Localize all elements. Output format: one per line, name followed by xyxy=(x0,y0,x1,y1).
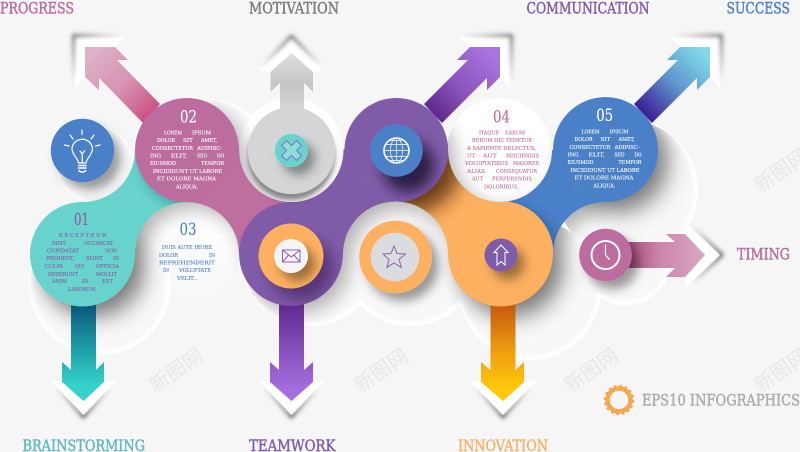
block 02: ELIT, xyxy=(171,154,187,160)
ribbon soft shadow xyxy=(37,104,670,318)
ribbon: orange section xyxy=(396,150,554,307)
block 05: AMET, xyxy=(618,137,635,143)
block 04: UT xyxy=(467,154,476,160)
watermark: 新图网 xyxy=(355,144,417,197)
block 05: ELIT, xyxy=(588,152,605,158)
block 02: SIT xyxy=(183,138,194,144)
node: cross on gray disc xyxy=(248,107,335,194)
icon: cross xyxy=(277,136,306,165)
icon: light bulb xyxy=(64,130,100,172)
block 01: SINT xyxy=(52,241,67,247)
ribbon: purple section xyxy=(239,98,449,306)
label: timing: TIMING xyxy=(737,246,790,264)
block 04: ITAQUE xyxy=(479,130,499,136)
block 05: TEMPOR xyxy=(618,160,643,166)
arrow: communication xyxy=(424,36,512,123)
block 04: ALIAS xyxy=(466,169,485,175)
block 02: TEMPOR xyxy=(201,161,225,167)
block 05: EIUSMOD xyxy=(568,160,594,166)
white recessed circles xyxy=(58,98,551,306)
flowing ribbon xyxy=(20,97,660,315)
block 04: A SAPIENTE DELECTUS, xyxy=(466,146,536,152)
block 05: CONSECTETUR xyxy=(570,145,612,151)
block 02: ING xyxy=(150,154,161,160)
block 01: MOLLIT xyxy=(96,272,117,278)
arrow: innovation xyxy=(469,300,537,417)
label: motivation: MOTIVATION xyxy=(249,0,339,18)
block 03: REPREHENDERIT xyxy=(159,260,216,266)
ribbon: pink section xyxy=(135,98,291,254)
block 02: IPSUM xyxy=(192,130,212,136)
arrow: timing xyxy=(625,222,722,289)
watermark: 新图网 xyxy=(560,344,622,397)
icon: globe xyxy=(384,138,409,163)
ribbon: teal shadow under pink xyxy=(140,104,244,208)
block 04: MAIORES xyxy=(513,161,539,167)
block 01: SUNT xyxy=(86,256,104,262)
block 04: AUT xyxy=(482,154,498,160)
block 01: ID xyxy=(82,279,88,285)
block 01: NON xyxy=(105,248,117,254)
block 02: CONSECTETUR xyxy=(152,146,194,152)
ribbon: dark shadow on upper purple xyxy=(382,140,434,192)
block 05 xyxy=(568,106,643,190)
block 02: INCIDIDUNT UT LABORE xyxy=(153,169,222,175)
node: arrow badge xyxy=(484,238,518,272)
block 04 xyxy=(464,108,539,190)
arrow: progress xyxy=(74,36,160,123)
node: globe xyxy=(370,124,423,177)
arrow: success xyxy=(634,36,722,123)
block 05: IPSUM xyxy=(610,130,629,136)
number 05: 05 xyxy=(596,106,613,125)
block 01: CULPA xyxy=(45,264,63,270)
block 03: VELIT... xyxy=(176,276,198,282)
block 02: EIUSMOD xyxy=(150,161,176,167)
label: success: SUCCESS xyxy=(726,0,790,18)
block 02: LOREM xyxy=(164,130,183,136)
block 05: ET DOLORE MAGNA xyxy=(574,176,634,182)
block 01: EXCEPTEUR xyxy=(59,233,107,239)
watermark: 新图网 xyxy=(350,344,412,397)
block 04: AUT xyxy=(471,176,483,182)
node: idea bulb xyxy=(51,119,114,182)
block 05: ALIQUA. xyxy=(593,184,616,190)
block 02: ET DOLORE MAGNA xyxy=(157,176,216,182)
block 05: ADIPISC- xyxy=(613,145,640,151)
watermark: 新图网 xyxy=(155,144,217,197)
block 05: ING xyxy=(568,152,578,158)
cloud halo interior xyxy=(33,102,694,356)
label: progress: PROGRESS xyxy=(0,0,74,18)
block 04: EARUM xyxy=(505,130,526,136)
block 02: AMET, xyxy=(200,138,217,144)
block 01: QUI xyxy=(75,264,84,270)
block 02: SED xyxy=(197,154,207,160)
icon: bookmark arrow xyxy=(494,245,508,265)
block 02: DO xyxy=(217,154,224,160)
block 01: CUPIDATAT xyxy=(47,248,80,254)
icon: envelope xyxy=(282,250,300,262)
block 04: REICIENDIS xyxy=(506,154,539,160)
node: clock xyxy=(579,229,632,281)
icon: star xyxy=(383,246,406,268)
block 01: LABORUM. xyxy=(68,287,97,293)
block 03: IN xyxy=(163,268,169,274)
block 02: ALIQUA. xyxy=(175,184,198,190)
block 01: ANIM xyxy=(51,279,68,285)
block 04: PERFERENDIS xyxy=(492,176,532,182)
block 05: DO xyxy=(634,152,642,158)
number 01: 01 xyxy=(74,210,89,229)
white cloud halo rim behind the ribbon xyxy=(29,98,698,360)
block 01: OFFICIA xyxy=(96,264,119,270)
block 04: DOLORIBUS.. xyxy=(484,184,520,190)
block 01: EST xyxy=(102,279,114,285)
node: star xyxy=(359,221,432,293)
block 05: SIT xyxy=(600,137,611,143)
block 03: IN xyxy=(209,253,215,259)
number 03: 03 xyxy=(180,220,196,239)
block 01: DESERUNT xyxy=(48,272,78,278)
block 05: INCIDIDUNT UT LABORE xyxy=(570,168,640,174)
block 01: OCCAECAT xyxy=(84,241,113,247)
block 05: LOREM xyxy=(582,130,600,136)
arrow: teamwork xyxy=(258,300,325,417)
block 01 xyxy=(45,210,119,293)
arrow: motivation xyxy=(260,36,323,110)
number 02: 02 xyxy=(180,108,197,126)
block 03: DUIS AUTE IRURE xyxy=(162,245,212,251)
block 03: DOLOR xyxy=(159,253,179,259)
block 01: PROIDENT, xyxy=(46,256,74,262)
block 04: RERUM HIC TENETUR xyxy=(472,138,533,144)
watermark: 新图网 xyxy=(565,144,627,197)
block 05: DOLOR xyxy=(574,137,593,143)
block 02 xyxy=(150,108,225,190)
watermark: 新图网 xyxy=(145,344,207,397)
ribbon: teal section xyxy=(30,140,210,306)
arrow: brainstorming xyxy=(50,300,117,417)
ribbon: brown shadow under purple xyxy=(358,110,462,214)
block 03: VOLUPTATE xyxy=(178,268,211,274)
block 04: VOLUPTATIBUS xyxy=(464,161,508,167)
node: envelope xyxy=(258,224,324,288)
block 03 xyxy=(159,220,216,282)
ribbon: blue section xyxy=(500,97,660,260)
label: communication: COMMUNICATION xyxy=(526,0,650,18)
block 05: SED xyxy=(614,152,624,158)
icon: clock xyxy=(592,241,620,269)
number 04: 04 xyxy=(493,108,510,126)
watermark xyxy=(145,144,800,397)
icon: gear xyxy=(605,386,633,414)
block 04: CONSEQUATUR xyxy=(496,169,538,175)
block 01: IN xyxy=(113,256,119,262)
block 02: ADIPISC- xyxy=(196,146,222,152)
ribbon: blue shadow under orange xyxy=(476,201,558,306)
ribbon: dark shadow on lower purple xyxy=(269,236,333,300)
block 02: DOLOR xyxy=(157,138,176,144)
